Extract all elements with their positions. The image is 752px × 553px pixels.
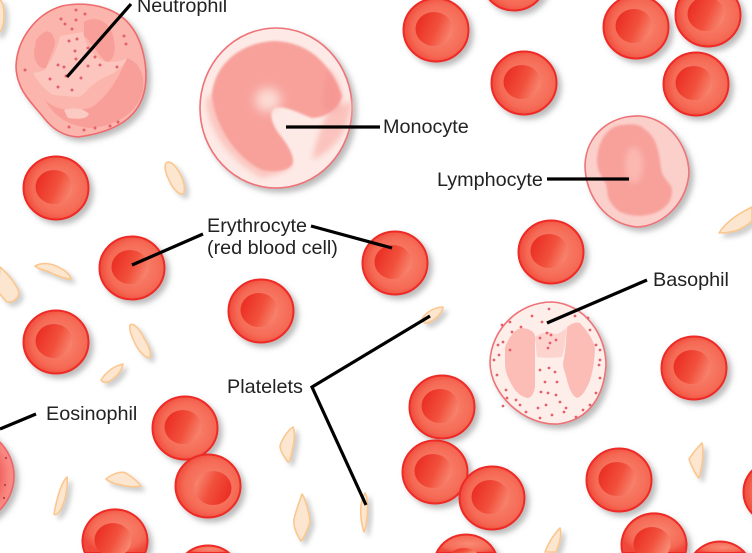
monocyte (200, 28, 352, 188)
label: Platelets: Platelets (227, 376, 303, 398)
label: Erythrocyte: (red blood cell) (207, 237, 338, 259)
label: Monocyte: Monocyte (383, 116, 469, 138)
label: Erythrocyte: Erythrocyte (207, 215, 307, 237)
basophil (490, 302, 606, 424)
lymphocyte (585, 116, 689, 227)
eosinophil (0, 425, 14, 527)
granules (494, 309, 600, 418)
label: Eosinophil: Eosinophil (46, 403, 137, 425)
neutrophil (16, 4, 146, 137)
label: Lymphocyte: Lymphocyte (437, 169, 543, 191)
label: Basophil: Basophil (653, 269, 729, 291)
granules (25, 10, 126, 130)
leader lines (0, 4, 647, 505)
